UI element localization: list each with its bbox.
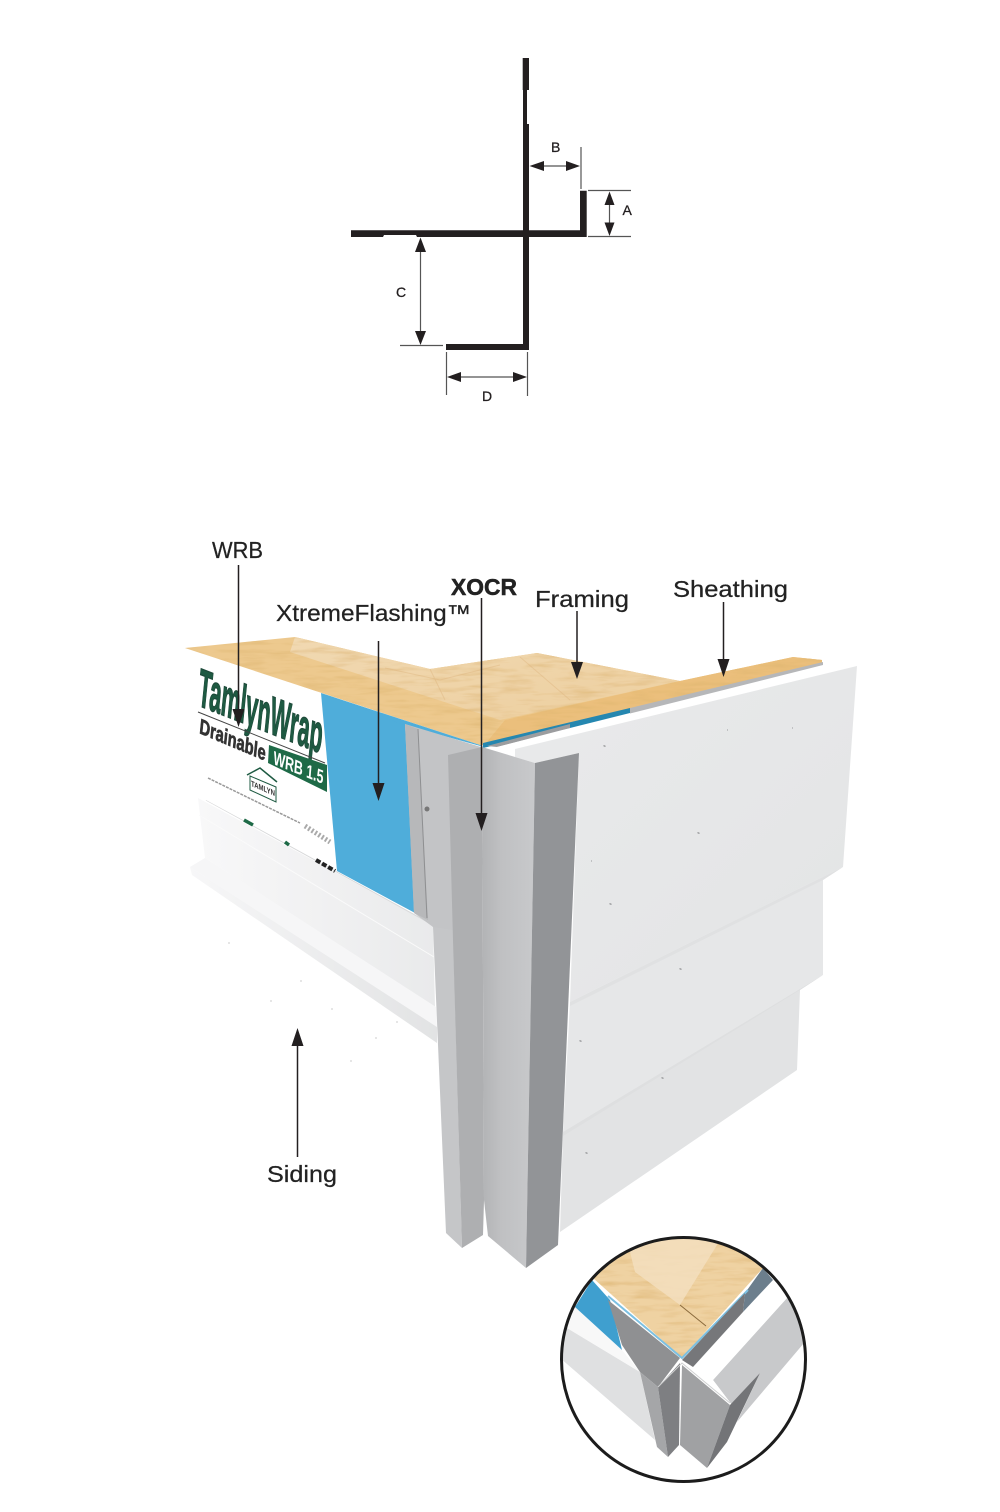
wrap product badge [268, 745, 327, 792]
dimension B [530, 139, 581, 189]
wrap logo [247, 768, 277, 802]
label: Siding [267, 1028, 337, 1187]
inset wood [594, 1239, 762, 1356]
trim center face [482, 747, 535, 1268]
dimension D: D [482, 388, 492, 404]
label: WRB: WRB [212, 537, 263, 563]
XtremeFlashing blue membrane [321, 693, 415, 913]
flashing gray leg with fastener [405, 724, 481, 960]
trim right wing [526, 753, 579, 1268]
inset right siding [713, 1298, 803, 1422]
diagram canvas [185, 58, 857, 1483]
corner assembly illustration: TamlynWrap [196, 657, 326, 765]
profile schematic with dimensions A B C D [351, 58, 632, 404]
siding top course, right [497, 664, 857, 1232]
dimension C [396, 238, 443, 346]
label: Sheathing: Sheathing [673, 576, 788, 602]
left siding course [190, 798, 437, 1062]
label: XOCR: XOCR [451, 574, 517, 600]
trim left wing [448, 747, 484, 1248]
dimension B: B [551, 139, 560, 155]
wrap logo: TAMLYN [251, 778, 275, 798]
trim left flange [433, 927, 462, 1248]
dimension C: C [396, 284, 406, 300]
XOCR profile section [351, 58, 587, 350]
wrap product name: Drainable [199, 714, 267, 766]
inset ring [562, 1238, 806, 1482]
dimension A [588, 190, 632, 236]
inset detail circle [560, 1236, 807, 1483]
inset blue membrane [575, 1280, 622, 1350]
WRB house wrap [185, 648, 337, 871]
corner assembly illustration [185, 637, 857, 1268]
label: WRB [212, 537, 263, 727]
label: Siding: Siding [267, 1161, 337, 1187]
blue and gray strips under sheathing [321, 662, 823, 748]
label: Sheathing [673, 576, 788, 677]
dimension A: A [622, 202, 632, 218]
wrap product badge: WRB 1.5 [273, 748, 324, 789]
label: Framing: Framing [535, 586, 629, 612]
wood framing top [185, 637, 822, 745]
dimension D [446, 352, 528, 404]
label: XtremeFlashing [276, 600, 471, 801]
label: XtremeFlashing: XtremeFlashing™ [276, 600, 471, 626]
label: XOCR [451, 574, 517, 831]
inset trim flanges [608, 1300, 680, 1387]
label: Framing [535, 586, 629, 679]
inset left siding [560, 1328, 655, 1440]
inset trim body [640, 1372, 668, 1457]
XOCR corner trim [433, 747, 579, 1268]
